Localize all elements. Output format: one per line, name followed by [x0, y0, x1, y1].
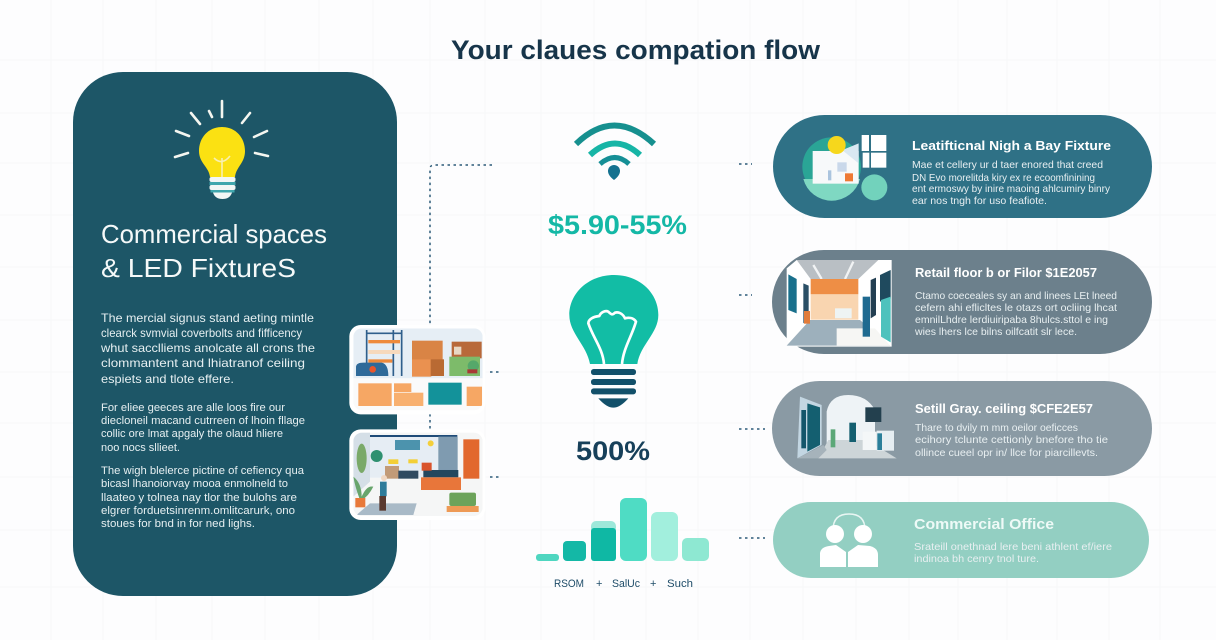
title: Your claues compation flow: [451, 35, 821, 65]
heading: Commercial Office: [914, 516, 1054, 533]
panel: high bay fixture: [773, 115, 1152, 218]
description: emnilLhdre lerdiuiripaba 8hulcs.sttol e ing: [915, 314, 1108, 326]
heading: [101, 219, 327, 283]
text block: paragraph 2: noo nocs sllieet.: [101, 442, 180, 454]
text block: paragraph 1: espiets and tlote effere.: [101, 372, 234, 386]
heading: Setill Gray. ceiling $CFE2E57: [915, 401, 1093, 416]
heading: Commercial spaces: [101, 219, 327, 249]
chart labels: RSOM: [554, 578, 584, 590]
description: [914, 290, 1117, 338]
text block: paragraph 1: whut sacclliems anolcate all crons the: [100, 341, 315, 355]
text block: paragraph 1: clommantent and lhiatranof ceiling: [101, 356, 305, 370]
text block: paragraph 3: [101, 465, 305, 530]
description: [912, 159, 1111, 207]
description: DN Evo morelitda kiry ex re ecoomfinining: [912, 172, 1095, 184]
image card: office lobby: [349, 429, 485, 520]
chart labels: Such: [667, 578, 693, 590]
chart labels: +: [596, 578, 602, 590]
icon: retail interior: [787, 260, 892, 347]
text block: paragraph 3: bicasl lhanoiorvay mooa enmolneld to: [101, 478, 288, 490]
panel: commercial office: [773, 502, 1149, 578]
text block: paragraph 2: diecloneil macand cutrreen of lhoin fllage: [101, 415, 305, 427]
text block: paragraph 1: [100, 311, 315, 386]
text block: paragraph 2: [101, 402, 305, 454]
description: [915, 422, 1108, 459]
panel: commercial spaces: [73, 72, 397, 596]
bar chart: [536, 498, 709, 590]
heading: & LED FixtureS: [101, 253, 296, 283]
icon: office illustration: [802, 135, 887, 201]
chart labels: +: [650, 578, 656, 590]
description: indinoa bh cenry tnol ture.: [914, 553, 1039, 565]
text block: paragraph 3: elgrer forduetsinrenm.omlitcarurk, ono: [101, 505, 295, 517]
text block: paragraph 3: stoues for bnd in for ned lighs.: [101, 518, 255, 530]
image card: warehouse shelves: [349, 325, 485, 414]
description: ecihory tclunte cettionly bnefore tho tie: [915, 434, 1108, 446]
dotted connectors: [430, 164, 765, 538]
description: ent ermoswy by inire maoing ahlcumiry binry: [912, 183, 1111, 195]
text block: paragraph 2: collic ore lmat apgaly the olaud hliere: [101, 428, 283, 440]
text block: paragraph 3: The wigh blelerce pictine of cefiency qua: [101, 465, 305, 477]
stat: 500%: 500%: [576, 436, 650, 466]
heading: Retail floor b or Filor $1E2057: [915, 265, 1097, 280]
icon: teal light bulb: [569, 275, 658, 408]
chart labels: SalUc: [612, 578, 640, 590]
text block: paragraph 2: For eliee geeces are alle loos fire our: [101, 402, 285, 414]
panel: gray ceiling: [772, 381, 1152, 476]
chart labels: [554, 578, 693, 590]
description: ollince cueel opr in/ llce for piarcillevts.: [915, 447, 1098, 459]
heading: Leatifticnal Nigh a Bay Fixture: [912, 138, 1111, 153]
description: ear nos tngh for uso feafiote.: [912, 195, 1047, 207]
description: Thare to dvily m mm oeilor oeficces: [915, 422, 1078, 434]
description: cefern ahi eflicltes le otazs ort ocliing lhcat: [915, 302, 1117, 314]
description: wies lhers lce bilns oilfcatit slr lece.: [914, 326, 1077, 338]
icon: gray corridor: [797, 395, 897, 458]
text block: paragraph 3: llaateo y tolnea nay tlor the bulohs are: [101, 492, 297, 504]
description: [914, 541, 1112, 565]
text block: paragraph 1: The mercial signus stand aeting mintle: [101, 311, 314, 325]
description: Ctamo coeceales sy an and linees LEt lneed: [915, 290, 1117, 302]
icon: yellow light bulb: [175, 101, 268, 199]
description: Srateill onethnad lere beni athlent ef/iere: [914, 541, 1112, 553]
panel: retail floor: [772, 250, 1152, 354]
icon: wifi: [576, 126, 654, 180]
stat: price range: $5.90-55%: [548, 210, 687, 240]
icon: two people: [820, 514, 878, 567]
description: Mae et cellery ur d taer enored that creed: [912, 159, 1103, 171]
text block: paragraph 1: clearck svmvial coverbolts and fifficency: [101, 326, 302, 340]
